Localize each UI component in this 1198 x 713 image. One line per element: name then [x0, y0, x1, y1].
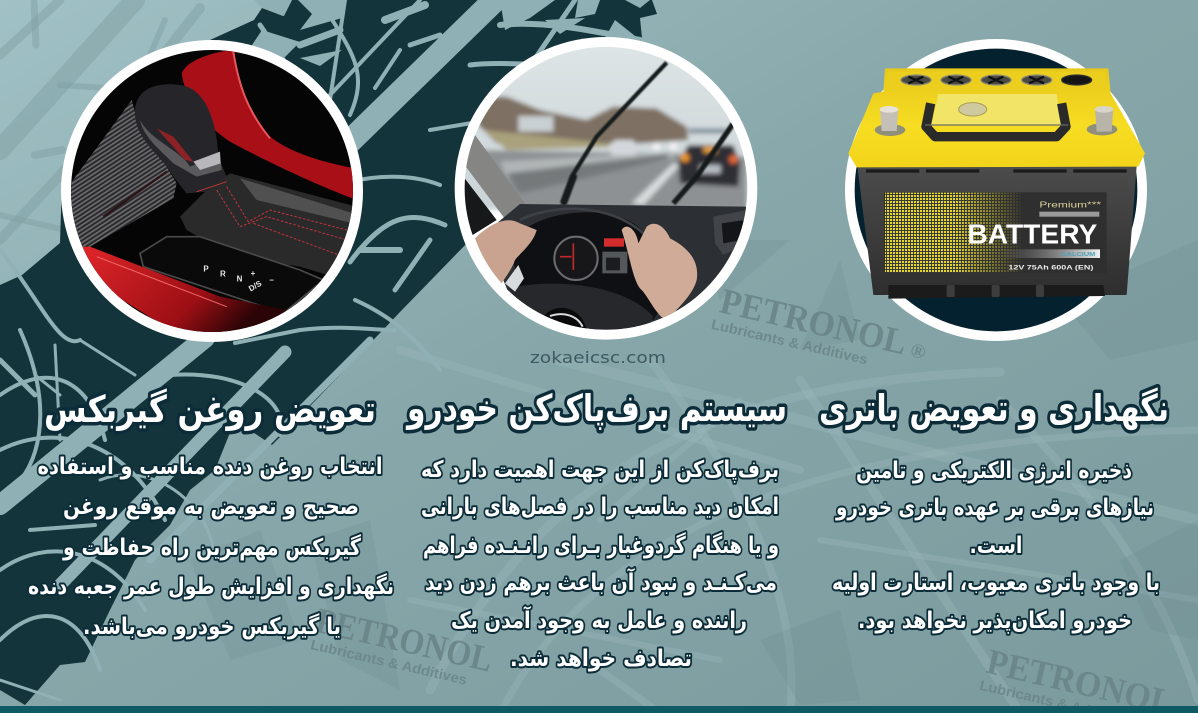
battery label: BATTERY — [967, 218, 1098, 249]
text block: wiper: امکان دید مناسب را در فصل‌های بارانی — [421, 494, 779, 520]
road scene — [464, 47, 748, 212]
shift labels: D/S — [247, 279, 264, 293]
text block: battery: خودرو امکان‌پذیر نخواهد بود. — [858, 608, 1132, 634]
website credit: zokaeicsc.com — [530, 348, 666, 367]
vent caps — [901, 75, 1092, 85]
text block: wiper — [421, 457, 779, 672]
text block: battery: ذخیره انرژی الکتریکی و تامین — [856, 458, 1132, 484]
text block: gearbox oil: نگهداری و افزایش طول عمر جعبه دنده — [28, 573, 394, 600]
handle — [926, 103, 1066, 137]
shift labels: + — [251, 269, 256, 278]
battery label: CALCIUM — [1061, 252, 1096, 258]
shift labels: P — [203, 265, 209, 274]
vents — [866, 169, 1127, 173]
leather boot — [180, 173, 357, 277]
dark tire track band — [0, 0, 657, 705]
text block: wiper: برف‌پاک‌کن از این جهت اهمیت دارد که — [421, 457, 779, 483]
steering wheel — [514, 212, 658, 320]
display — [604, 238, 624, 247]
terminals — [875, 106, 1117, 136]
battery label: 12V 75Ah 600A (EN) — [1008, 264, 1093, 271]
red door trim top — [182, 50, 357, 200]
white stalk — [505, 265, 524, 292]
text block: wiper: می‌کـنـد و نبود آن باعث برهم زدن دید — [425, 567, 777, 596]
text block: wiper: و یا هنگام گردوغبار بـرای رانـنـده فراهم — [423, 532, 779, 559]
watermark: Petronol centre: Lubricants & Additives — [710, 316, 870, 367]
text block: gearbox oil: یا گیربکس خودرو می‌باشد. — [83, 613, 341, 640]
text block: gearbox oil: انتخاب روغن دنده مناسب و استفاده — [38, 454, 382, 480]
shift labels — [204, 266, 274, 292]
watermark: Petronol left: Lubricants & Additives — [309, 636, 469, 688]
shift labels: R — [220, 270, 226, 279]
battery label — [884, 192, 1107, 273]
wiper blades — [564, 63, 733, 203]
shift console — [140, 237, 323, 313]
faint tire track lower right — [400, 350, 1198, 713]
photo circle: windshield wiper and steering wheel — [453, 37, 760, 340]
watermark: Petronol centre: PETRONOL — [717, 281, 911, 362]
gauge — [554, 237, 598, 280]
handle plate — [932, 94, 1062, 125]
photo circle: gear shifter — [61, 40, 363, 342]
battery case — [857, 166, 1137, 295]
tire tread lines — [0, 0, 640, 700]
text block: gearbox oil: صحیح و تعویض به موقع روغن — [63, 494, 359, 520]
text block: battery — [832, 458, 1160, 634]
text block: gearbox oil: گیربکس مهم‌ترین راه حفاظت و — [62, 534, 362, 561]
text block: wiper: تصادف خواهد شد. — [510, 646, 692, 672]
shift rod shadow — [103, 172, 167, 217]
photo circle: car battery — [845, 39, 1147, 341]
gear knob — [135, 84, 227, 193]
bottom bar — [0, 706, 1198, 713]
dashboard — [490, 204, 750, 330]
A pillar — [466, 135, 525, 218]
carbon trim panel — [63, 100, 177, 247]
red bottom trim — [80, 247, 287, 332]
yellow lid — [848, 68, 1145, 167]
watermark: Petronol left: PETRONOL — [312, 600, 497, 680]
faint dark tread blocks — [190, 240, 1198, 705]
faint tire track upper left — [0, 0, 200, 240]
watermark: Petronol centre: ® — [908, 339, 928, 364]
bottom ledge — [888, 285, 1105, 299]
heading: wiper: سیستم برف‌پاک‌کن خودرو — [405, 387, 787, 430]
text block: gearbox oil — [28, 454, 394, 640]
battery label: Premium*** — [1039, 200, 1102, 210]
heading: gearbox oil: تعویض روغن گیربکس — [44, 388, 376, 431]
shift labels: N — [237, 275, 243, 284]
text block: wiper: راننده و عامل به وجود آمدن یک — [451, 605, 747, 634]
shift labels: – — [269, 275, 274, 284]
hands — [475, 220, 537, 283]
text block: battery: است. — [970, 533, 1022, 559]
light gaps in tread blocks — [250, 0, 650, 66]
